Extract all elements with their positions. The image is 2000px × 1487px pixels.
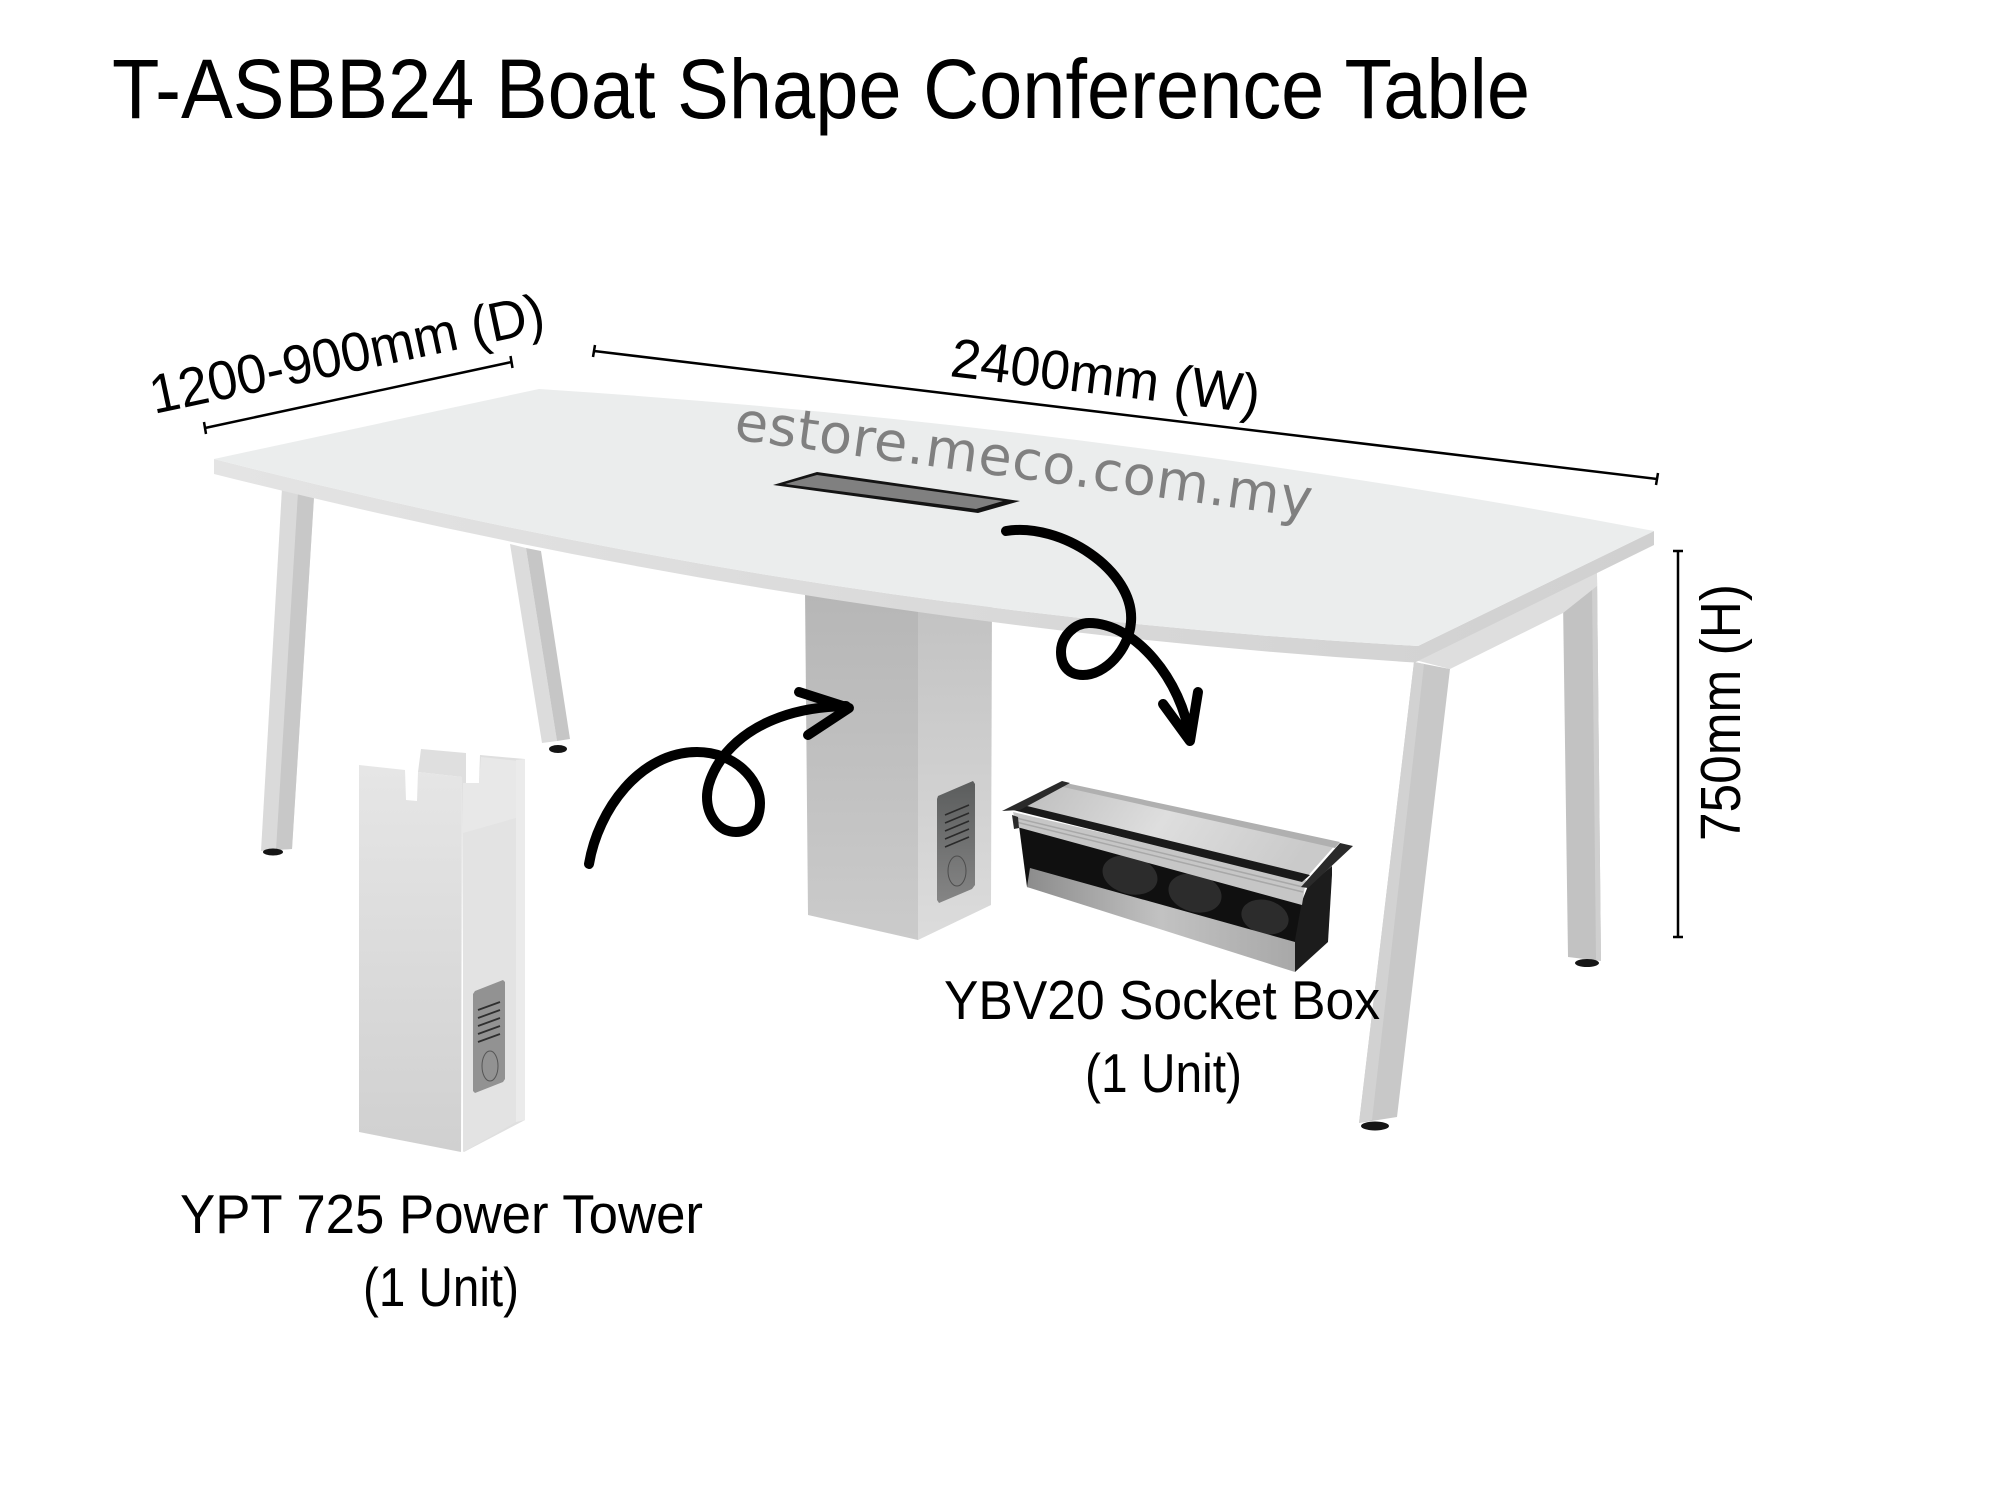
caption: socket box	[944, 969, 1380, 1104]
table edge	[214, 459, 1654, 662]
socket box	[1002, 781, 1353, 972]
socket outlets	[1098, 849, 1293, 940]
socket box rail stripes	[1016, 818, 1303, 892]
tower rear strip	[516, 759, 525, 1122]
column access panel	[937, 781, 975, 903]
arrow: tower to column	[589, 692, 849, 864]
dimension line: height	[1673, 551, 1683, 937]
back left leg	[510, 544, 570, 753]
socket box right side	[1295, 866, 1332, 972]
socket box front rail	[1013, 812, 1306, 905]
tower inner shadow	[463, 757, 519, 834]
grommet slot on table	[773, 472, 1020, 513]
caption: power tower: (1 Unit)	[363, 1256, 519, 1318]
socket box top plate	[1023, 785, 1337, 878]
socket box interior	[1019, 826, 1303, 945]
table top surface	[214, 389, 1654, 646]
dimension line: width	[593, 345, 1658, 485]
depth label: 1200-900mm (D)	[144, 282, 550, 426]
socket box dark slit	[1013, 805, 1310, 882]
conference table	[214, 389, 1654, 1130]
dimension line: depth	[204, 356, 512, 434]
caption: socket box: YBV20 Socket Box	[944, 969, 1380, 1031]
socket box back rail	[1063, 783, 1340, 848]
tower side face	[463, 818, 516, 1152]
caption: socket box: (1 Unit)	[1085, 1042, 1242, 1104]
front right leg	[1359, 662, 1450, 1130]
underside apron	[1415, 571, 1597, 669]
tower back panel	[418, 749, 525, 1152]
watermark: estore.meco.com.my	[731, 389, 1316, 531]
tower front face	[359, 765, 462, 1152]
title: T-ASBB24 Boat Shape Conference Table	[112, 42, 1530, 136]
back right leg	[1563, 575, 1601, 967]
socket box lower silver panel	[1027, 868, 1295, 972]
power tower	[359, 749, 525, 1152]
width label: 2400mm (W)	[948, 326, 1264, 425]
height label: 750mm (H)	[1689, 584, 1753, 841]
central column	[805, 590, 992, 940]
tower access panel	[473, 980, 505, 1093]
arrow: slot to socket box	[1006, 530, 1198, 741]
caption: power tower: YPT 725 Power Tower	[180, 1183, 703, 1245]
front left leg	[261, 488, 314, 856]
caption: power tower	[180, 1183, 703, 1318]
socket box flanges	[1002, 781, 1353, 888]
